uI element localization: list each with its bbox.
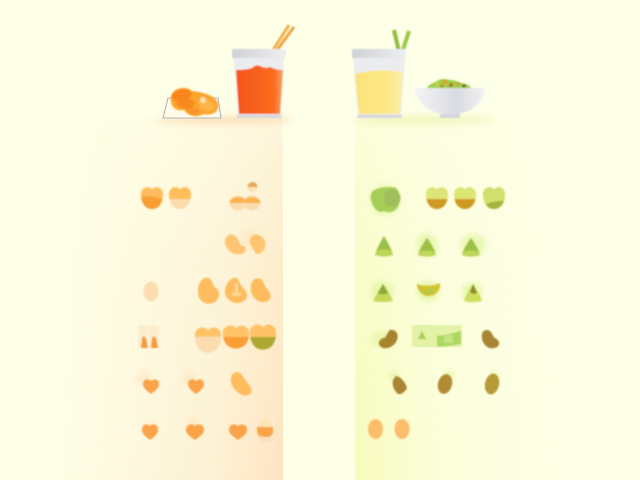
right panel: green band <box>355 118 492 480</box>
cone 5 <box>464 284 482 302</box>
cone 1 <box>375 236 393 256</box>
tooth green a <box>425 186 449 211</box>
left floor glow <box>155 117 295 123</box>
cone 3 <box>462 238 480 256</box>
orange liquid <box>236 65 283 114</box>
cone 2 <box>418 238 436 256</box>
icon: salad bowl <box>415 79 485 118</box>
tooth icon row 1 b <box>168 186 192 211</box>
cup body <box>353 58 405 116</box>
oval <box>144 282 158 302</box>
icon: yellow drink cup with straws <box>352 30 409 118</box>
orange oval 2 <box>394 419 410 439</box>
panel: small cone and book <box>412 325 462 347</box>
tooth row 4 b <box>222 324 250 351</box>
kidney bean 1 <box>379 330 398 348</box>
tooth row 4 a <box>194 326 222 353</box>
right column halos <box>370 185 499 381</box>
green fruit pair <box>371 187 400 212</box>
right column icons <box>368 186 506 439</box>
left panel: peach band <box>114 118 283 480</box>
cup base <box>357 115 402 118</box>
bean row 3 b <box>225 278 247 303</box>
bowl <box>415 88 485 114</box>
tooth pair <box>230 196 260 210</box>
tooth row 6 <box>257 418 273 442</box>
seed 3 <box>483 372 501 396</box>
salad <box>427 79 471 88</box>
heart row 5 a <box>143 379 159 394</box>
number mark <box>232 283 241 296</box>
seed 1 <box>393 376 407 394</box>
kidney bean 2 <box>482 330 499 348</box>
beans row 2 <box>225 234 265 254</box>
seed 2 <box>436 373 454 395</box>
tooth row 4 c <box>249 323 277 352</box>
tooth green b <box>453 186 477 211</box>
straws <box>394 30 400 56</box>
heart row 6 a <box>142 424 158 440</box>
cup body <box>234 58 284 116</box>
bean row 3 c <box>251 278 271 302</box>
left column icons <box>138 182 277 442</box>
heart row 6 b <box>186 424 204 440</box>
infographic canvas <box>114 24 506 480</box>
bowl foot <box>440 114 460 118</box>
yellow liquid <box>355 70 403 114</box>
heart row 5 b <box>188 379 204 394</box>
bean row 5 <box>231 372 252 396</box>
bean row 3 a <box>198 278 219 304</box>
tooth green c <box>482 186 506 210</box>
cups pair row 4 <box>138 325 159 348</box>
cone 4 <box>373 284 393 302</box>
smile shape <box>417 283 440 296</box>
cup lid <box>232 49 286 58</box>
cup lid <box>352 49 406 58</box>
icon: orange drink cup with straws <box>232 25 294 118</box>
left column halos <box>137 230 256 431</box>
cup base <box>237 115 282 118</box>
orange oval 1 <box>368 419 383 439</box>
tooth icon row 1 a <box>140 186 164 210</box>
icon: fried food in basket <box>163 88 221 118</box>
right floor glow <box>353 117 497 123</box>
small tooth <box>248 182 258 192</box>
heart row 6 c <box>229 424 247 440</box>
straws <box>273 25 294 50</box>
